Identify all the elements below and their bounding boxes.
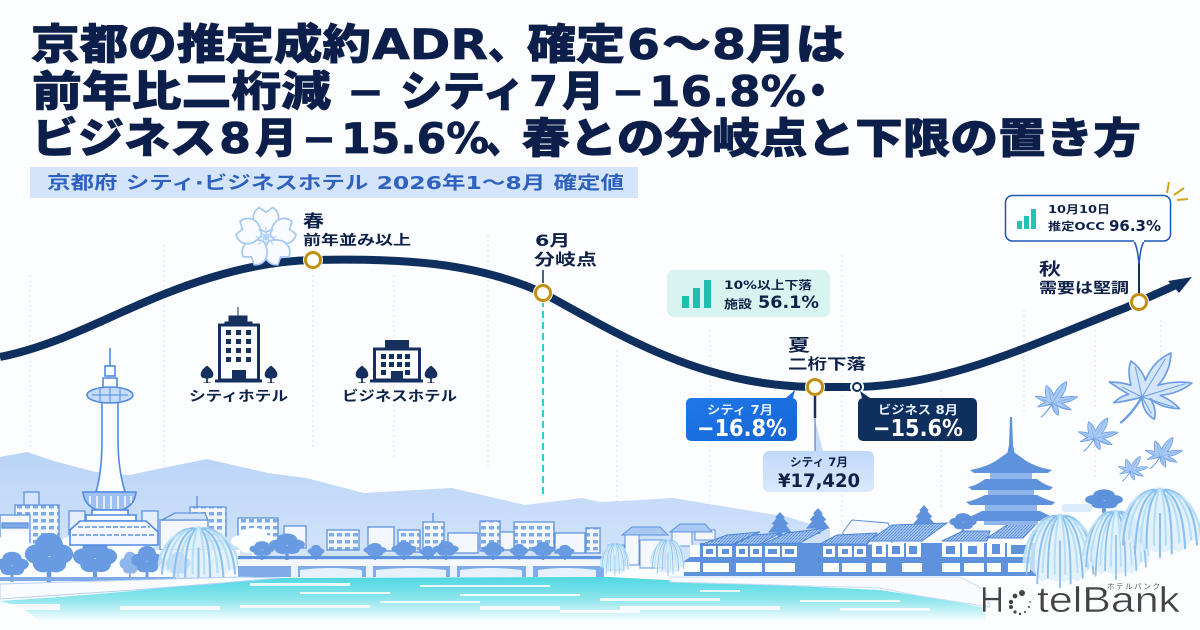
label: June: 6月 xyxy=(535,231,570,250)
willow right xyxy=(1024,488,1200,588)
logo: H xyxy=(980,579,1004,620)
callout: city July change: シティ 7月 xyxy=(707,403,773,417)
subtitle badge xyxy=(30,167,638,198)
title: 8 xyxy=(219,114,251,163)
title: ・ xyxy=(798,67,838,116)
curve markers xyxy=(303,250,1149,397)
title: ビジネス xyxy=(32,114,216,163)
label: June: 分岐点 xyxy=(534,250,597,269)
title: 月 xyxy=(562,67,604,116)
callout: city July ADR: ¥17,420 xyxy=(778,470,860,492)
label: autumn: 需要は堅調 xyxy=(1039,280,1129,297)
title: 、 xyxy=(488,20,528,69)
title: 16.8% xyxy=(649,67,806,116)
label: June xyxy=(534,231,597,269)
title: 8 xyxy=(712,20,746,69)
callout: city July ADR: シティ 7月 xyxy=(790,455,848,469)
title: 京都の推定成約 xyxy=(31,20,371,69)
logo: telBank xyxy=(1037,579,1181,620)
subtitle badge: 京都府 シティ·ビジネスホテル 2026年1〜8月 確定値 xyxy=(47,172,624,194)
title: 15.6% xyxy=(341,114,489,163)
callout: 10% decline share xyxy=(667,270,830,317)
bridge xyxy=(238,556,604,579)
mountains xyxy=(0,452,830,560)
title: 6 xyxy=(627,20,660,69)
title: 、 xyxy=(486,114,522,163)
title: 前年比二桁減 xyxy=(32,67,331,116)
label: city hotel: シティホテル xyxy=(189,389,288,405)
callout: 10% decline share: 56.1% xyxy=(758,293,819,313)
title: 春との分岐点と下限の置き方 xyxy=(522,114,1141,163)
small background houses xyxy=(608,524,715,570)
title: 7 xyxy=(529,67,558,116)
title: − xyxy=(612,67,644,116)
left tree row xyxy=(0,526,574,585)
callout: October occupancy: 10月10日 xyxy=(1048,203,1110,216)
skyline illustration xyxy=(0,348,1200,622)
callout: city July change: −16.8% xyxy=(697,416,787,442)
callout: 10% decline share: 10%以上下落 xyxy=(724,278,813,292)
callout: city July change xyxy=(686,390,797,442)
label: autumn: 秋 xyxy=(1039,260,1061,280)
teal dashed line: June xyxy=(542,300,544,497)
label: autumn xyxy=(1039,260,1129,297)
connector: city July ADR xyxy=(815,396,823,452)
callout: October occupancy: 推定OCC xyxy=(1048,219,1105,233)
callout: October occupancy: 96.3% xyxy=(1109,217,1161,235)
title: 月は xyxy=(746,20,845,69)
icon: city hotel xyxy=(201,307,277,383)
callout: business August change: ビジネス 8月 xyxy=(878,402,958,417)
kyoto tower xyxy=(70,348,158,545)
title: − xyxy=(302,114,336,163)
icon: sakura xyxy=(234,208,298,268)
river bank xyxy=(0,577,280,599)
label: spring: 春 xyxy=(303,212,324,232)
curve arrow head xyxy=(1168,277,1192,293)
callout: city July ADR xyxy=(763,451,874,492)
maple leaves xyxy=(1035,353,1192,481)
icon: sparkle xyxy=(1167,182,1188,200)
label: spring: 前年並み以上 xyxy=(303,232,411,249)
callout: October occupancy xyxy=(1006,196,1170,293)
callout: business August change xyxy=(858,391,977,442)
trend curve xyxy=(0,260,1176,387)
label: spring xyxy=(303,212,411,249)
pagoda xyxy=(965,417,1056,525)
label: summer xyxy=(788,336,866,373)
icon: business hotel xyxy=(356,340,437,383)
logo xyxy=(980,579,1181,620)
title: 〜 xyxy=(662,20,711,69)
title: 確定 xyxy=(527,20,625,69)
title xyxy=(31,20,1141,163)
title: シティ xyxy=(400,67,525,116)
label: summer: 二桁下落 xyxy=(788,355,866,373)
title: 月 xyxy=(255,114,297,163)
title: − xyxy=(347,67,384,116)
logo: ホテルバンク xyxy=(1107,582,1160,591)
left city buildings xyxy=(0,492,600,553)
river xyxy=(0,577,985,622)
label: summer: 夏 xyxy=(788,336,810,356)
title: ADR xyxy=(372,20,488,69)
machiya townhouses xyxy=(601,505,1037,607)
label: business hotel: ビジネスホテル xyxy=(342,388,457,405)
callout: business August change: −15.6% xyxy=(873,416,963,442)
June tick xyxy=(542,270,544,286)
callout: 10% decline share: 施設 xyxy=(724,297,753,311)
